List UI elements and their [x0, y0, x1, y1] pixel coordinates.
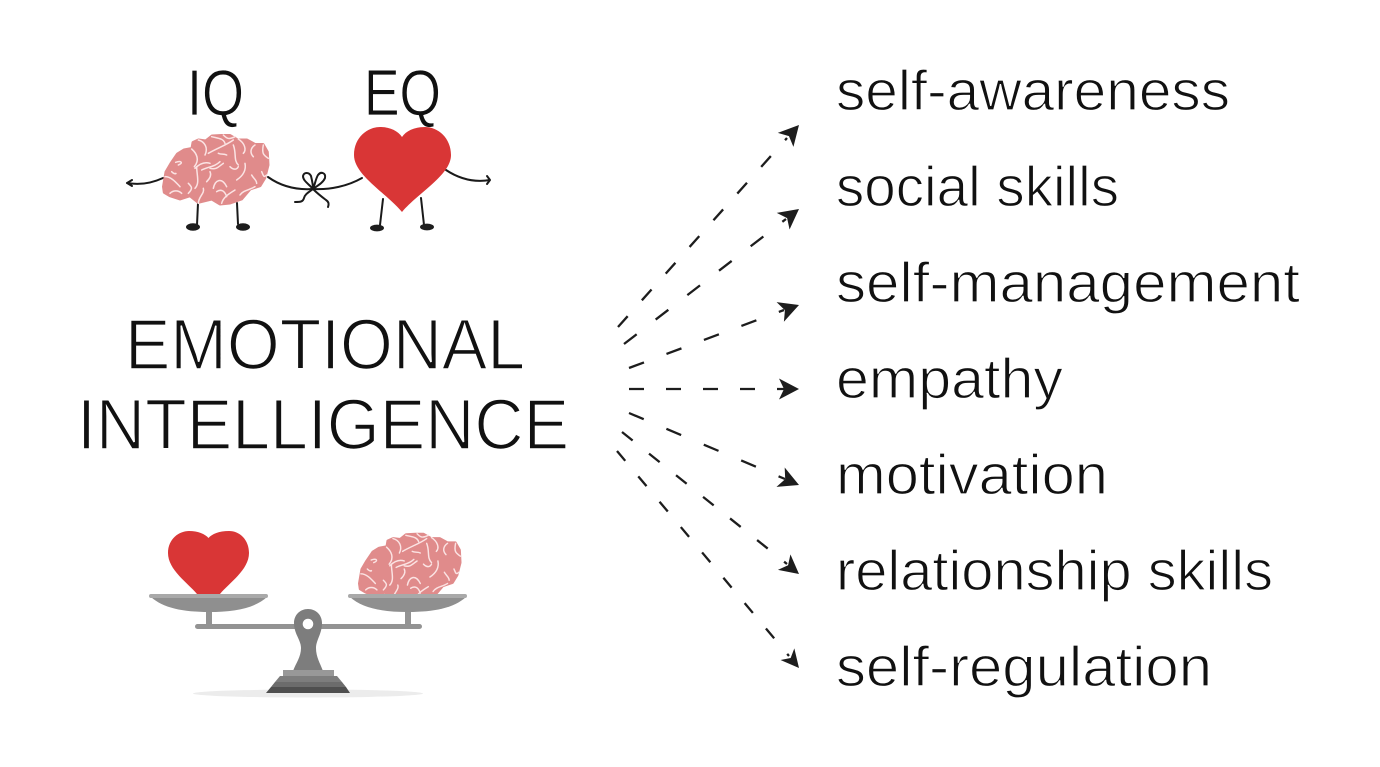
heading: EQ: EQ [364, 56, 441, 129]
label: motivation: motivation [836, 443, 1108, 507]
title: Emotional Intelligence [77, 306, 569, 465]
label: self-regulation: self-regulation [836, 635, 1212, 699]
icon: brain character limbs [127, 178, 250, 231]
arrow to motivation [629, 413, 803, 495]
icon: scale shadow [193, 690, 423, 698]
arrow to empathy [629, 378, 799, 400]
panel: IQ and EQ characters [127, 56, 490, 231]
arrow to relationship skills [622, 432, 805, 582]
heading: IQ: IQ [187, 56, 244, 129]
icon: scale beam and stems [195, 611, 422, 629]
arrow to social skills [624, 201, 805, 344]
arrow to self-awareness [618, 118, 807, 327]
arrow to self-regulation [617, 451, 806, 674]
icon: heart [354, 127, 451, 212]
panel: balance scale with heart and brain [149, 531, 467, 698]
label: self-awareness: self-awareness [836, 59, 1230, 123]
icon: heart character limbs [370, 170, 490, 231]
icon: brain on right pan [359, 534, 460, 600]
icon: brain [164, 135, 268, 204]
icon: heart on left pan [168, 531, 249, 594]
title: Emotional Intelligence: INTELLIGENCE [77, 386, 569, 465]
label: social skills: social skills [836, 155, 1119, 219]
list: emotional intelligence skills [836, 59, 1300, 699]
icon: scale fulcrum [266, 609, 350, 693]
arrows: dashed arrows from title to skills [617, 118, 807, 674]
icon: right scale pan [348, 594, 467, 612]
arrow to self-management [629, 295, 803, 368]
icon: left scale pan [149, 594, 268, 612]
title: Emotional Intelligence: EMOTIONAL [125, 306, 525, 385]
label: self-management: self-management [836, 251, 1300, 315]
label: empathy: empathy [836, 347, 1064, 411]
icon: string joining brain and heart with bow [268, 173, 362, 207]
label: relationship skills: relationship skills [836, 539, 1273, 603]
